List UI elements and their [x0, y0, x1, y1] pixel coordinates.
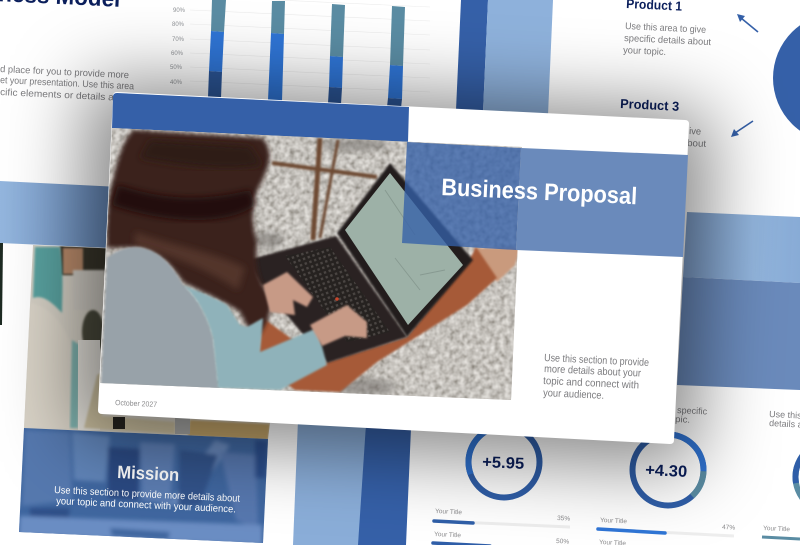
description text: more details about your [544, 363, 642, 380]
medium blue band [677, 277, 800, 390]
photo: patterned scarf [63, 248, 83, 274]
panel photo tones [19, 430, 268, 545]
mission text: Use this section to provide more details about [54, 485, 240, 505]
chart axis labels: 80% [172, 22, 185, 28]
slide shadow [76, 80, 712, 468]
grey shoulder [101, 247, 219, 392]
photo: teal braid [33, 247, 62, 313]
progress rows column 1: Your Title [434, 531, 461, 539]
progress rows column 3: Your Title [763, 525, 790, 533]
laptop lid [337, 163, 473, 337]
photo [24, 245, 270, 439]
dark column [358, 424, 411, 545]
donut +5.95 [458, 416, 550, 508]
chart axis labels: 70% [172, 37, 185, 43]
text block: model description: et your presentation. Use this area [0, 75, 135, 92]
metric caption 3 [769, 409, 800, 430]
panel: mission [19, 428, 268, 545]
sweater sleeve [183, 285, 327, 390]
donut +4.30 [631, 433, 705, 507]
dark photo sliver [0, 243, 3, 325]
light column [293, 420, 366, 545]
description text [543, 352, 649, 402]
upper hand [263, 272, 313, 315]
blue translucent overlay [402, 142, 521, 250]
chart axis labels: 60% [171, 51, 184, 57]
donut +5.95: +5.95 [482, 454, 525, 473]
background slide: team photo [0, 243, 270, 439]
photo: bush [82, 310, 104, 354]
photo: window [72, 268, 105, 276]
photo: yellow jacket [188, 420, 270, 441]
product 3 text [687, 126, 707, 150]
date: October 2027 [115, 398, 157, 409]
keyboard keys [285, 247, 390, 342]
description text: your audience. [543, 387, 604, 402]
donut +4.30: +4.30 [645, 462, 688, 481]
bar 1 [208, 0, 226, 98]
title: Business Proposal: Business Proposal [441, 174, 638, 210]
progress rows column 2: 47% [722, 524, 735, 532]
progress rows column 1: 35% [557, 515, 570, 523]
wood frame [272, 138, 377, 240]
metric caption 2: specific [677, 405, 708, 416]
photo: dark collar [113, 417, 125, 429]
chart axis labels: 40% [170, 80, 183, 86]
background slide: metrics [433, 405, 800, 545]
light column [483, 0, 553, 115]
product 3 text: ive [689, 126, 701, 138]
arrow: up-left [737, 14, 758, 32]
hair [107, 130, 271, 338]
trackpoint [335, 297, 339, 301]
orange skirt [257, 247, 497, 392]
screen details [385, 190, 445, 290]
mission title: Mission [117, 462, 180, 485]
progress rows column 2: Your Title [600, 517, 627, 525]
light blue band [0, 181, 120, 248]
laptop base [248, 236, 407, 363]
donut right [790, 436, 800, 518]
progress rows column 1 [433, 508, 570, 545]
text block: model description [0, 64, 135, 104]
background slide: right bands [677, 212, 800, 390]
text block: model description: cific elements or details abo [0, 87, 125, 104]
panel background [19, 428, 268, 543]
laptop screen [345, 173, 463, 325]
top blue bar [112, 93, 409, 142]
background columns bottom [293, 420, 411, 545]
mission text: your topic and connect with your audience. [56, 496, 236, 515]
photo: white coat [24, 303, 73, 430]
photo: woman on laptop [95, 125, 525, 405]
arrow: down-left [731, 121, 753, 137]
product 3 text: bout [687, 138, 707, 150]
bar 3 [328, 4, 345, 104]
chart axis labels [170, 8, 186, 86]
legs [473, 248, 520, 282]
dark column [456, 0, 488, 112]
metric caption 2 [675, 405, 708, 425]
background columns top [456, 0, 553, 115]
photo: teal tail [70, 340, 80, 428]
background slide: products [620, 0, 800, 150]
progress rows column 2 [598, 517, 735, 545]
title band [516, 148, 688, 257]
text block: model description: d place for you to provide more [0, 64, 129, 81]
metric caption 2: pic. [675, 414, 690, 425]
chart axis labels: 50% [170, 65, 183, 71]
background slide: business model [0, 0, 135, 248]
slide card [98, 92, 689, 444]
description text: Use this section to provide [544, 352, 649, 369]
photo: white wall [78, 340, 100, 430]
bar 4 [387, 6, 405, 108]
chart axis labels: 90% [173, 8, 186, 14]
description text: topic and connect with [543, 375, 639, 392]
bar 2 [268, 1, 285, 101]
dark carpet patches [252, 139, 395, 396]
photo: tan coat [84, 372, 175, 434]
light band [683, 212, 800, 283]
product 3 heading: Product 3 [620, 96, 679, 114]
lower hand [310, 305, 367, 346]
progress rows column 3 [762, 525, 800, 539]
product 1 text: your topic. [623, 45, 666, 58]
bar chart [170, 0, 430, 108]
mission text [54, 485, 240, 515]
product 1 text [623, 21, 712, 58]
product 1 text: specific details about [624, 33, 712, 48]
photo: dark backdrop [60, 245, 110, 275]
product 1 text: Use this area to give [625, 21, 706, 36]
main slide: business proposal [76, 80, 712, 468]
progress rows column 1: Your Title [435, 508, 462, 516]
circle chart [773, 13, 800, 143]
